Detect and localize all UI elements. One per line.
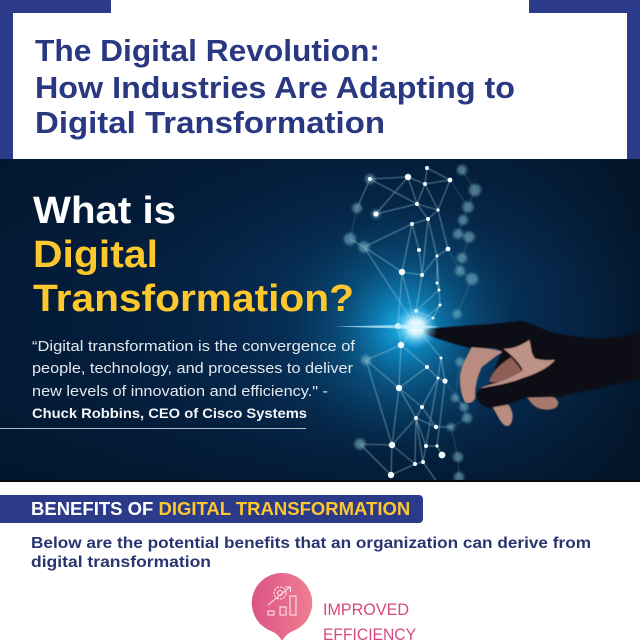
hero heading: Transformation? — [33, 278, 354, 320]
quote: new levels of innovation and efficiency." - — [32, 383, 328, 400]
benefit label — [323, 600, 416, 640]
benefit: improved efficiency — [252, 573, 416, 640]
section banner — [0, 495, 423, 523]
middle finger — [460, 347, 502, 403]
bright nodes — [368, 166, 452, 478]
section banner: BENEFITS OF DIGITAL TRANSFORMATION — [31, 498, 410, 519]
hero heading: Digital — [33, 234, 158, 276]
section intro text: Below are the potential benefits that an organization can derive from — [31, 535, 591, 552]
title panel — [0, 0, 640, 160]
ring finger — [489, 357, 522, 382]
title: The Digital Revolution: — [35, 33, 380, 68]
quote — [32, 338, 356, 421]
lower fingertip — [493, 405, 513, 426]
light flare — [335, 305, 440, 349]
icon: location pin with chart and gear — [252, 573, 312, 640]
quote: “Digital transformation is the convergence of — [32, 338, 356, 355]
hero heading — [33, 190, 354, 320]
quote: people, technology, and processes to deliver — [32, 360, 353, 377]
network graphic — [344, 165, 481, 482]
benefit label: IMPROVED — [323, 600, 409, 619]
hand silhouette — [423, 321, 640, 408]
quote: Chuck Robbins, CEO of Cisco Systems — [32, 405, 307, 421]
section intro text: digital transformation — [31, 554, 211, 571]
hand pointing — [423, 321, 640, 426]
palm highlight — [481, 340, 555, 388]
hero panel: what is digital transformation — [0, 159, 640, 482]
title: How Industries Are Adapting to — [35, 70, 515, 105]
dim nodes — [344, 165, 481, 482]
hero heading: What is — [33, 190, 176, 232]
little finger — [527, 397, 558, 410]
section intro text — [31, 535, 591, 571]
title — [35, 33, 515, 140]
title: Digital Transformation — [35, 105, 385, 140]
